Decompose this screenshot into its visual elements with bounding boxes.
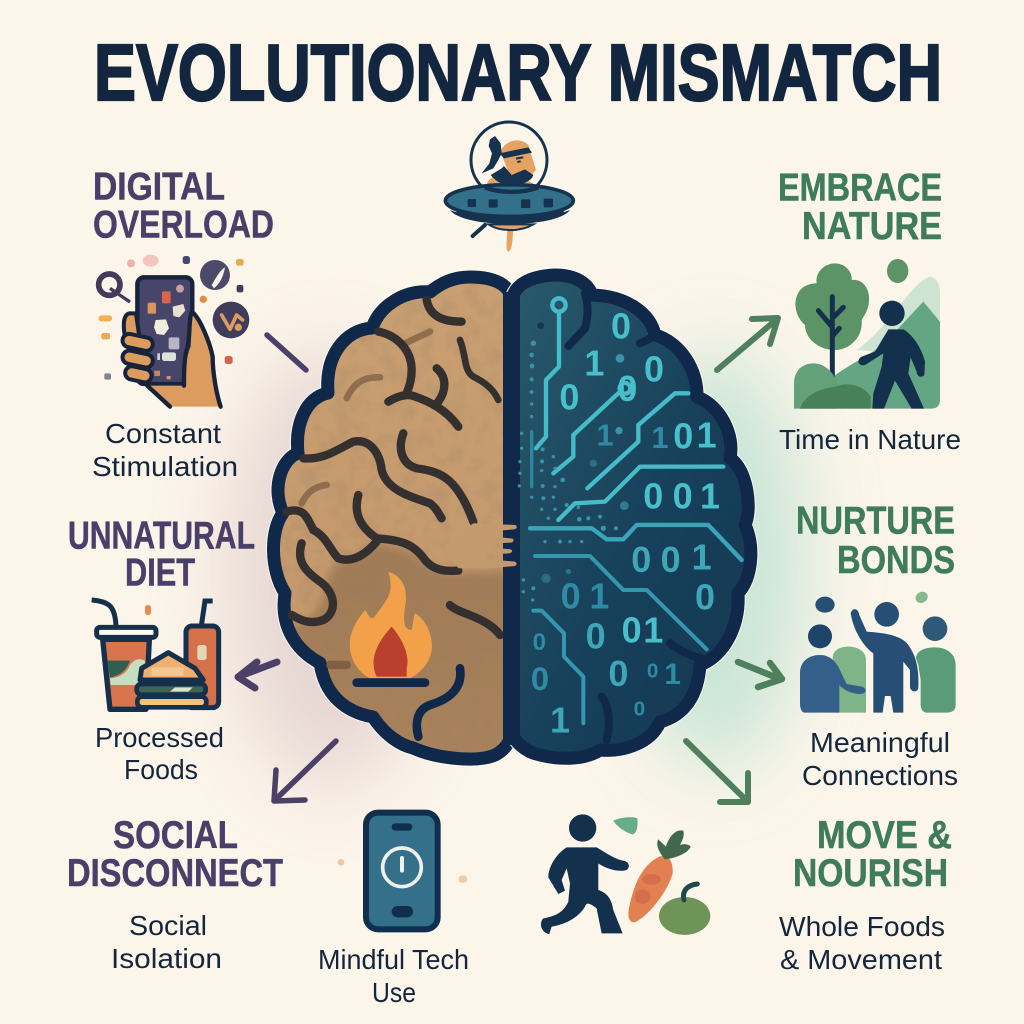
- icon: caveman in flying saucer: [445, 122, 573, 252]
- binary digits: 1: [692, 536, 712, 577]
- text: whole foods and movement: Whole Foods: [779, 911, 945, 942]
- binary digits: 0: [631, 539, 651, 580]
- arrow: unnatural diet: [238, 662, 277, 688]
- text: meaningful connections: Connections: [802, 760, 958, 791]
- heading: digital overload: [93, 166, 274, 246]
- binary digits: 0: [561, 575, 581, 616]
- text: processed foods: [95, 722, 224, 785]
- binary digits: 0: [622, 610, 642, 651]
- binary digits: 0: [608, 653, 628, 694]
- binary digits: 0: [695, 576, 715, 617]
- icon: mindful phone: [338, 813, 467, 929]
- text: mindful tech use: Mindful Tech: [318, 944, 469, 975]
- text: meaningful connections: [802, 727, 958, 791]
- brain folds: [287, 300, 500, 737]
- binary digits: 1: [643, 610, 663, 651]
- binary digits: 1: [584, 343, 604, 384]
- binary digits: 1: [596, 419, 614, 453]
- heading: unnatural diet: UNNATURAL: [68, 514, 255, 558]
- brain: left organic hemisphere: [270, 270, 515, 770]
- binary digits: 1: [664, 658, 681, 691]
- icon: running person with carrot and apple: [541, 814, 710, 935]
- heading: unnatural diet: [68, 514, 255, 594]
- binary digits: 1: [550, 700, 570, 741]
- icon: campfire: [350, 572, 432, 683]
- binary digits: 0: [634, 698, 645, 721]
- icon: processed food: [92, 600, 219, 709]
- text: constant stimulation: Constant: [105, 418, 221, 449]
- heading: move and nourish: NOURISH: [793, 852, 948, 895]
- heading: digital overload: DIGITAL: [93, 166, 225, 208]
- text: constant stimulation: [92, 418, 238, 482]
- binary digits: 0: [531, 660, 549, 697]
- text: constant stimulation: Stimulation: [92, 451, 238, 482]
- text: processed foods: Foods: [124, 754, 198, 785]
- heading: social disconnect: SOCIAL: [113, 814, 238, 857]
- binary digits: 0: [643, 475, 663, 516]
- arrow: move and nourish: [686, 741, 748, 802]
- central divide: [503, 292, 520, 745]
- binary digits: 1: [697, 414, 717, 455]
- heading: embrace nature: NATURE: [802, 205, 942, 248]
- circuit traces: [518, 293, 742, 740]
- binary digits: 0: [533, 629, 546, 656]
- icon: group of people: [800, 590, 956, 713]
- heading: embrace nature: [778, 166, 942, 248]
- arrow: digital overload: [267, 335, 306, 370]
- binary digits: 1: [651, 421, 669, 455]
- binary digits: 0: [661, 539, 681, 580]
- brain: right digital hemisphere: [503, 275, 751, 758]
- arrow: embrace nature: [717, 318, 778, 370]
- arrow: social disconnect: [274, 741, 336, 801]
- binary digits: 0: [617, 368, 637, 409]
- icon: hand holding phone: [99, 255, 249, 407]
- binary digits: 0: [644, 349, 664, 390]
- binary digits: [531, 305, 720, 741]
- heading: social disconnect: DISCONNECT: [67, 852, 283, 895]
- text: mindful tech use: Use: [372, 977, 416, 1008]
- brain: fingers of tissue crossing the divide: [443, 523, 517, 568]
- binary digits: 0: [611, 305, 631, 346]
- binary digits: 1: [700, 475, 720, 516]
- text: meaningful connections: Meaningful: [810, 727, 950, 758]
- heading: move and nourish: [793, 814, 952, 895]
- binary digits: 0: [673, 475, 693, 516]
- arrow: nurture bonds: [738, 662, 782, 687]
- text: time in nature: Time in Nature: [779, 424, 961, 455]
- brain: [270, 270, 751, 770]
- binary digits: 0: [673, 415, 693, 456]
- binary digits: 0: [559, 376, 579, 417]
- heading: social disconnect: [67, 814, 283, 895]
- text: social isolation: [111, 910, 222, 974]
- icon: person walking in nature: [794, 259, 940, 409]
- heading: move and nourish: MOVE &: [817, 814, 952, 857]
- heading: nurture bonds: NURTURE: [796, 500, 955, 542]
- binary digits: 1: [589, 575, 609, 616]
- heading: digital overload: OVERLOAD: [93, 204, 274, 246]
- heading: nurture bonds: [796, 500, 955, 582]
- binary digits: 0: [586, 615, 606, 656]
- text: whole foods and movement: & Movement: [780, 944, 942, 975]
- heading: unnatural diet: DIET: [125, 552, 195, 594]
- text: social isolation: Social: [129, 910, 207, 941]
- heading: nurture bonds: BONDS: [837, 539, 955, 582]
- text: whole foods and movement: [779, 911, 945, 975]
- text: mindful tech use: [318, 944, 469, 1008]
- text: processed foods: Processed: [95, 722, 224, 753]
- text: social isolation: Isolation: [111, 943, 222, 974]
- binary digits: 0: [647, 659, 658, 682]
- heading: embrace nature: EMBRACE: [778, 166, 942, 210]
